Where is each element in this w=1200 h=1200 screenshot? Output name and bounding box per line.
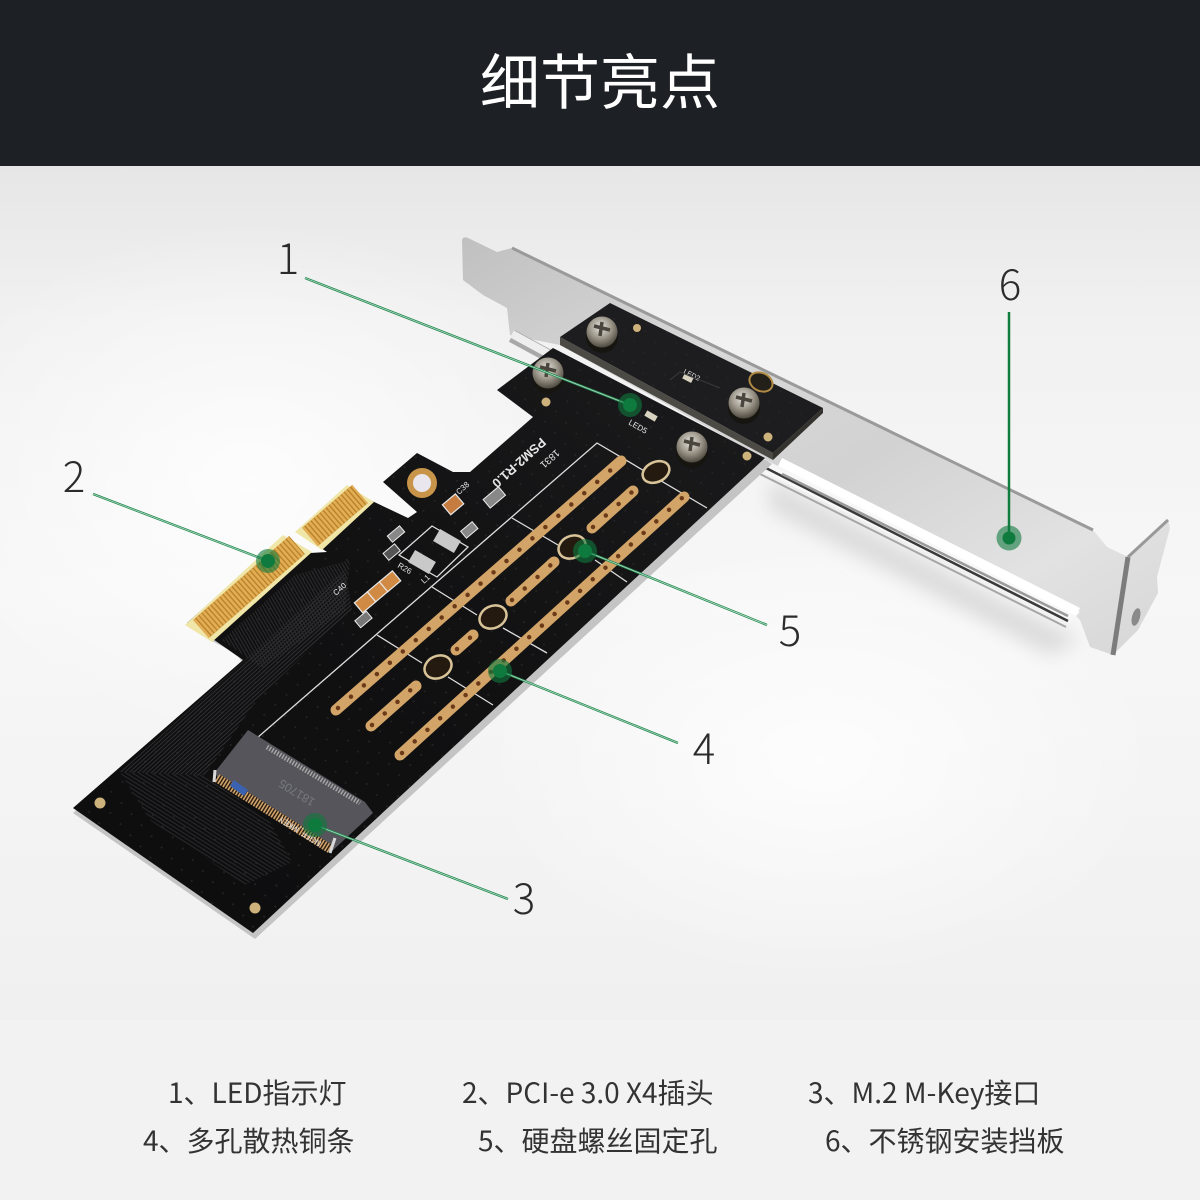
rod behind the board: [512, 336, 560, 362]
board silkscreen text: LED5: [627, 418, 649, 436]
title: 细节亮点: [480, 35, 720, 122]
callout 4: 4: [693, 716, 715, 777]
bottom legend panel: [0, 1020, 1200, 1200]
golden fingers: [185, 485, 374, 642]
screw slot in flange: [1130, 607, 1142, 627]
bracket LED board: [560, 303, 823, 460]
callout 2: [63, 444, 280, 573]
solder pads and components: [354, 468, 506, 628]
oval mounting holes: [421, 457, 673, 683]
callout 3: [303, 813, 535, 927]
callout 6: 6: [999, 252, 1021, 313]
board silkscreen text: C38: [454, 480, 472, 496]
main circuit board: [73, 348, 772, 939]
callout 1: [277, 226, 642, 417]
callout 2: 2: [63, 444, 85, 505]
product photo: PCIe M.2 adapter card: [73, 237, 1170, 939]
steel bracket: [462, 237, 1170, 655]
M.2 connector: 181705: [276, 776, 318, 809]
legend row 1: [168, 1072, 1040, 1112]
bracket LED board: LED2: [682, 369, 701, 383]
legend row 1: 3、M.2 M-Key接口: [808, 1072, 1040, 1112]
board silkscreen text: [276, 418, 649, 848]
LED marker: [644, 410, 658, 422]
callout 5: [573, 539, 801, 659]
screws: [532, 316, 760, 468]
M.2 gold strips: [336, 461, 684, 755]
callout 3: 3: [513, 866, 535, 927]
board silkscreen text: NGFF_MKEY: [276, 814, 323, 848]
board silkscreen text: L1: [419, 572, 432, 585]
board silkscreen text: C40: [331, 581, 349, 597]
copper traces: [120, 560, 352, 885]
bracket lip: [755, 458, 1080, 622]
mounting pads: [94, 398, 752, 914]
callout 1: 1: [277, 226, 299, 287]
legend row 2: [143, 1120, 1065, 1160]
legend row 2: 5、硬盘螺丝固定孔: [478, 1120, 718, 1160]
callout 6: [996, 252, 1022, 550]
legend row 1: 1、LED指示灯: [168, 1072, 347, 1112]
photo background: [0, 166, 1200, 1020]
header bar: [0, 0, 1200, 166]
silkscreen lines: [257, 443, 707, 738]
M.2 connector: [214, 730, 373, 853]
legend row 2: 6、不锈钢安装挡板: [825, 1120, 1065, 1160]
board silkscreen text: R26: [396, 561, 414, 576]
legend row 1: 2、PCI-e 3.0 X4插头: [462, 1072, 714, 1112]
callout 5: 5: [779, 598, 801, 659]
board silkscreen text: PSM2-R1.0: [489, 435, 549, 491]
soft shadows: [770, 480, 1080, 655]
strip via holes: [338, 462, 682, 753]
legend row 2: 4、多孔散热铜条: [143, 1120, 355, 1160]
board silkscreen text: 1831: [537, 447, 561, 470]
callout 4: [488, 659, 715, 777]
board edge: [73, 422, 772, 939]
